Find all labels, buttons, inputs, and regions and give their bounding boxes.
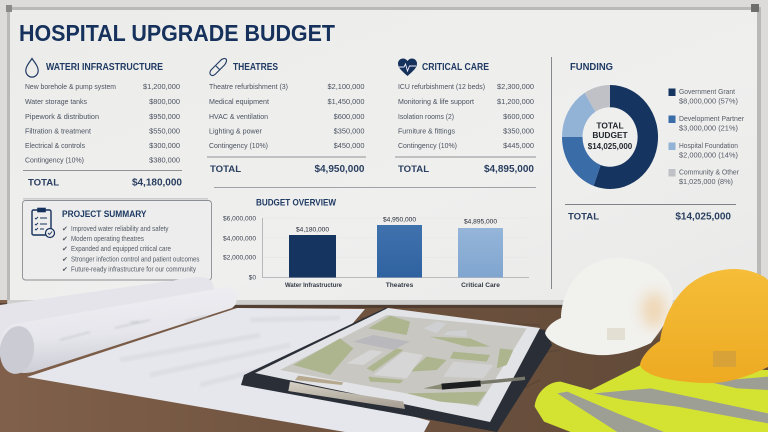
yellow hard hat [640, 269, 768, 383]
bar: theatres: $4,950,000 [383, 216, 416, 224]
line items: critical care: Contingency (10%) [398, 141, 457, 150]
checklist: Expanded and equipped critical care [71, 245, 171, 253]
checklist: Stronger infection control and patient outcomes [71, 256, 200, 264]
checklist: ✔ [62, 245, 68, 253]
panel: critical care [395, 58, 536, 175]
line items: theatres: HVAC & ventilation [209, 112, 268, 121]
checklist: ✔ [62, 225, 68, 233]
donut centre label: BUDGET [592, 130, 629, 140]
total: critical care [398, 164, 534, 175]
line items: theatres: Medical equipment [209, 97, 269, 106]
clipboard with site plan [241, 308, 552, 432]
heading: project summary: PROJECT SUMMARY [62, 208, 147, 219]
panel: theatres [207, 59, 366, 175]
y axis labels: $4,000,000 [223, 236, 256, 242]
checklist: ✔ [62, 256, 68, 264]
line items: critical care: $350,000 [503, 126, 534, 136]
checklist [62, 225, 200, 274]
total: funding: TOTAL [568, 212, 599, 222]
blueprint rolls [0, 277, 237, 376]
y axis labels [223, 216, 256, 282]
white hard hat [545, 258, 673, 355]
line items: water: Water storage tanks [25, 97, 87, 106]
line items: water: $800,000 [149, 97, 180, 106]
line items: theatres [209, 82, 364, 150]
legend: Hospital Foundation [679, 141, 738, 150]
bar: critical care [458, 218, 503, 289]
bar: critical care: Critical Care [461, 282, 500, 289]
legend: $1,025,000 (8%) [679, 177, 733, 186]
total: funding [568, 212, 731, 222]
checklist: Future-ready infrastructure for our community [71, 266, 196, 274]
y axis labels: $6,000,000 [223, 216, 256, 222]
line items: critical care: $2,300,000 [497, 82, 534, 91]
line items: critical care: $445,000 [503, 141, 534, 150]
clipboard clip [288, 376, 405, 409]
line items: water: New borehole & pump system [25, 82, 116, 91]
legend: $8,000,000 (57%) [679, 96, 738, 106]
line items: water: Filtration & treatment [25, 126, 91, 136]
line items: theatres: $450,000 [334, 141, 364, 150]
bar: theatres: Theatres [386, 282, 414, 289]
checklist: Improved water reliability and safety [71, 225, 169, 233]
legend: Community & Other [679, 168, 740, 176]
whiteboard [6, 4, 761, 305]
y axis labels: $0 [249, 274, 256, 282]
total: theatres: TOTAL [210, 164, 241, 175]
checklist: ✔ [62, 235, 68, 243]
icon: scalpel [210, 59, 226, 76]
line items: theatres: $350,000 [334, 126, 364, 136]
pen [423, 378, 525, 389]
donut centre label: TOTAL [596, 120, 624, 130]
total: theatres: $4,950,000 [314, 164, 365, 175]
total: critical care: TOTAL [398, 164, 429, 175]
total: theatres [210, 164, 365, 175]
line items: water: Electrical & controls [25, 141, 85, 150]
line items: theatres: Lighting & power [209, 126, 263, 136]
total: water: TOTAL [28, 178, 59, 188]
line items: water: $950,000 [149, 112, 180, 121]
line items: critical care: Furniture & fittings [398, 126, 455, 136]
blueprint sheet [27, 308, 430, 432]
donut chart [562, 85, 658, 189]
line items: critical care: Monitoring & life support [398, 97, 474, 106]
line items: water: $550,000 [149, 126, 180, 136]
legend [668, 87, 745, 186]
total: water [28, 178, 182, 188]
donut centre label: $14,025,000 [588, 142, 633, 151]
panel: funding [562, 62, 745, 222]
high-visibility vest [535, 365, 768, 432]
line items: water: $380,000 [149, 156, 180, 164]
checklist: Modern operating theatres [71, 235, 144, 243]
line items: critical care [398, 82, 534, 150]
line items: critical care: $600,000 [503, 112, 534, 121]
legend: $2,000,000 (14%) [679, 150, 738, 160]
title: HOSPITAL UPGRADE BUDGET [19, 20, 336, 46]
icon: clipboard checklist [32, 208, 54, 238]
bar: water infrastructure [285, 226, 342, 289]
bar chart: budget overview [223, 198, 529, 289]
line items: water: Contingency (10%) [25, 156, 84, 164]
line items: critical care: ICU refurbishment (12 beds) [398, 82, 485, 91]
line items: theatres: $2,100,000 [328, 82, 364, 91]
line items: theatres: Theatre refurbishment (3) [209, 82, 288, 91]
bar: critical care: $4,895,000 [464, 218, 497, 226]
bar: theatres [377, 216, 422, 289]
panel: project summary [22, 200, 212, 280]
total: critical care: $4,895,000 [484, 164, 534, 175]
heading: water infrastructure: WATERI INFRASTRUCTURE [46, 62, 163, 73]
total: water: $4,180,000 [132, 178, 182, 188]
heading: funding: FUNDING [570, 62, 613, 73]
bar: water infrastructure: $4,180,000 [296, 226, 329, 234]
line items: water: Pipework & distribution [25, 112, 99, 121]
line items: water [25, 82, 180, 164]
legend: Development Partner [679, 114, 745, 123]
wooden table [0, 300, 768, 432]
heading: budget overview: BUDGET OVERVIEW [256, 198, 336, 208]
line items: water: $300,000 [149, 141, 180, 150]
legend: $3,000,000 (21%) [679, 124, 738, 132]
icon: heart with pulse [398, 58, 417, 76]
panel: water infrastructure [23, 58, 182, 188]
bar: water infrastructure: Water Infrastructure [285, 282, 342, 289]
donut centre label [588, 120, 633, 151]
total: funding: $14,025,000 [675, 212, 731, 222]
legend: Government Grant [679, 87, 735, 96]
heading: theatres: THEATRES [233, 62, 278, 73]
icon: water drop [26, 58, 38, 77]
line items: critical care: $1,200,000 [497, 97, 534, 106]
line items: water: $1,200,000 [143, 82, 180, 91]
line items: theatres: Contingency (10%) [209, 141, 268, 150]
line items: theatres: $600,000 [334, 112, 364, 121]
line items: critical care: Isolation rooms (2) [398, 112, 454, 121]
line items: theatres: $1,450,000 [328, 97, 364, 106]
y axis labels: $2,000,000 [223, 254, 256, 262]
heading: critical care: CRITICAL CARE [422, 62, 489, 73]
checklist: ✔ [62, 266, 68, 274]
site plan map [280, 315, 527, 409]
